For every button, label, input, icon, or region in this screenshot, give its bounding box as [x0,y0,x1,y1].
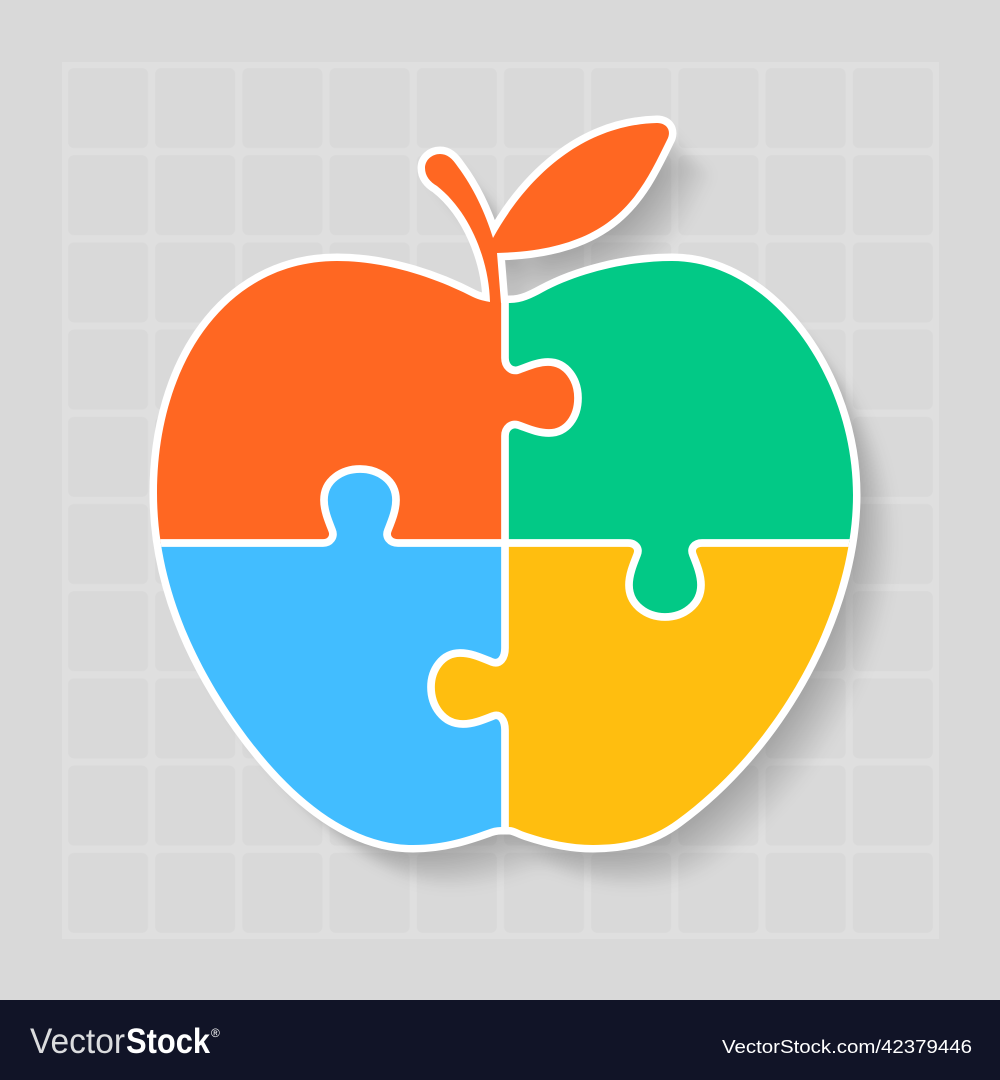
footer logo: Stock [126,1022,210,1061]
apple shadow [162,129,893,887]
footer logo [30,1022,220,1061]
footer logo: ® [211,1026,220,1040]
footer bar [0,1000,1000,1080]
background grid [62,62,939,939]
piece: green top right [508,261,853,614]
puzzle apple pieces [157,123,853,845]
footer id: VectorStock.com/42379446 [722,1036,972,1057]
puzzle seams [160,303,850,827]
apple outline [157,123,853,845]
piece: orange top left with leaf and stem [157,123,669,543]
piece: blue bottom left [160,472,502,845]
footer logo: Vector [30,1022,125,1061]
piece: yellow bottom right [434,543,849,845]
